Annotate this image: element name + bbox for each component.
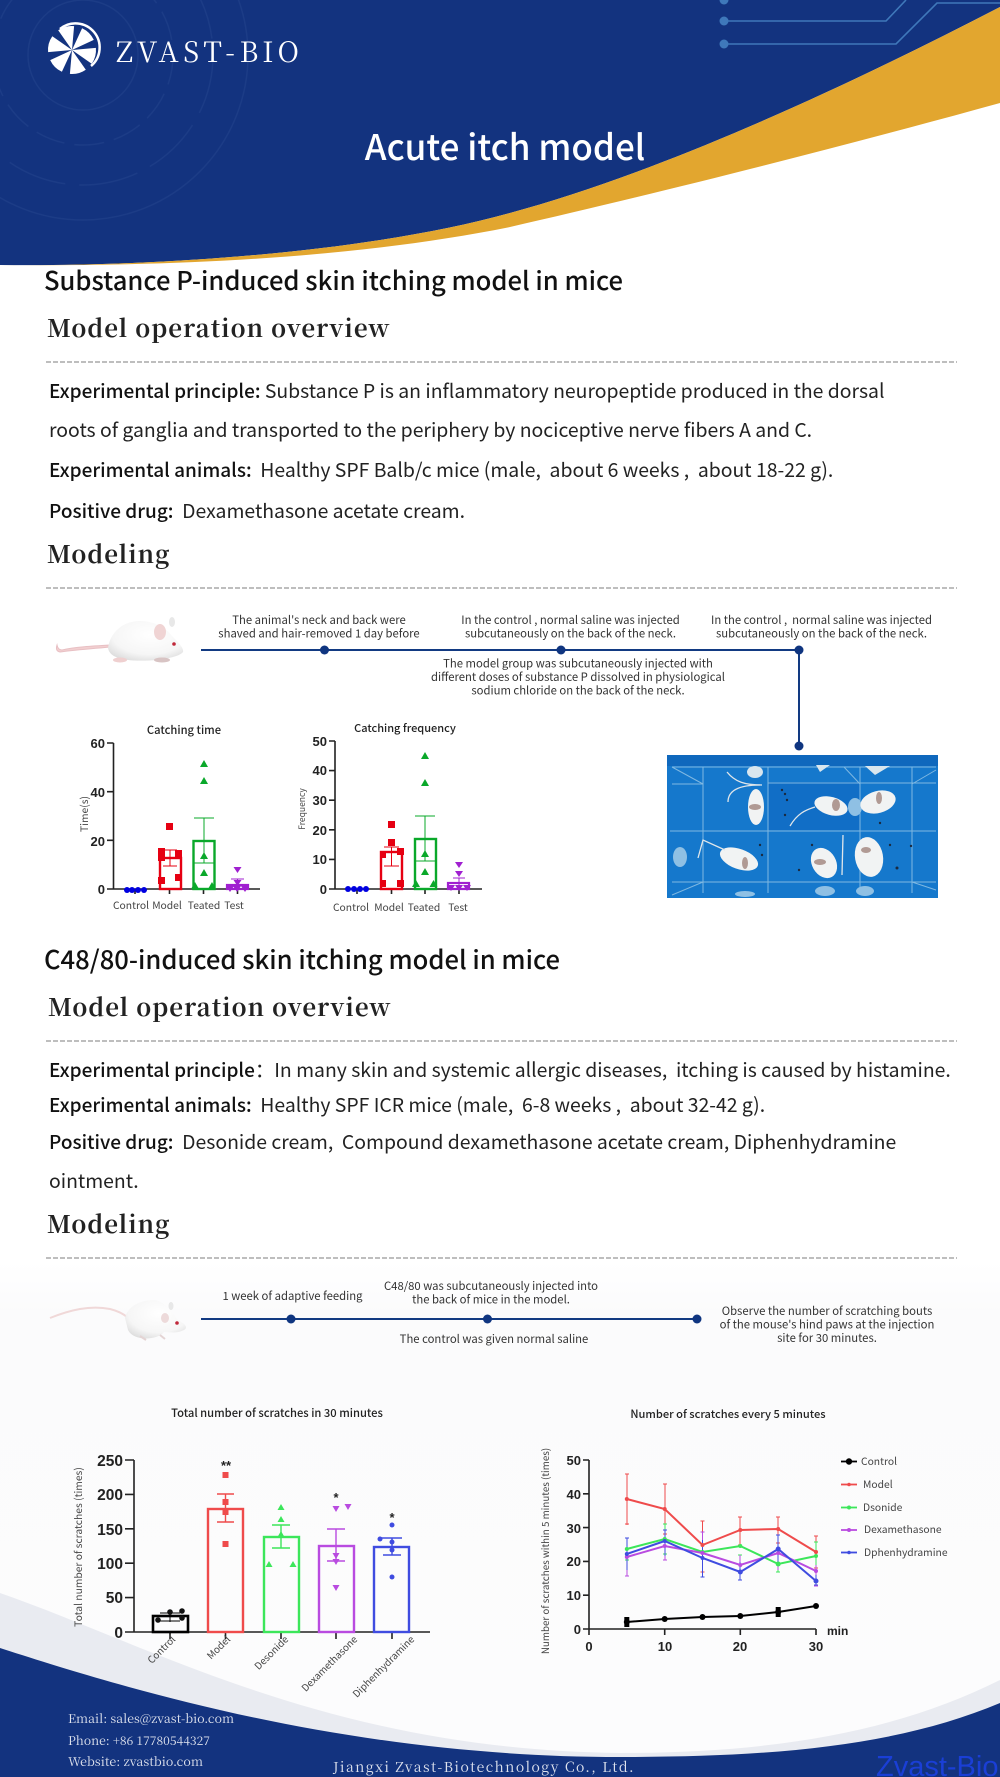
- text block: model overview: ointment.: [49, 1165, 139, 1194]
- icon: mouse: [56, 617, 183, 662]
- timeline labels: In the control , normal saline was injected: [461, 612, 680, 628]
- timeline: C48/80: [201, 1314, 702, 1324]
- bar chart: catching frequency: 20: [313, 823, 327, 838]
- line chart: scratches every 5 minutes: 30: [567, 1521, 581, 1536]
- timeline labels: 1 week of adaptive feeding: [222, 1288, 363, 1304]
- timeline labels: subcutaneously on the back of the neck.: [716, 626, 927, 642]
- bar chart: catching time: 40: [91, 785, 105, 800]
- legend: Dexamethasone: [864, 1521, 942, 1536]
- bar chart: catching frequency: Model: [374, 899, 404, 914]
- contact details: Phone: +86 17780544327: [68, 1732, 210, 1749]
- line chart: scratches every 5 minutes: 0: [585, 1639, 593, 1654]
- footer band: [0, 1593, 1000, 1777]
- timeline labels: different doses of substance P dissolved in physiological: [431, 669, 725, 685]
- line chart: scratches every 5 minutes: 20: [733, 1639, 747, 1654]
- legend: [841, 1453, 948, 1559]
- contact details: Email: sales@zvast-bio.com: [68, 1710, 234, 1727]
- bar chart: total scratches: 0: [114, 1625, 123, 1642]
- subheading: model operation overview: Model operation overview: [47, 309, 391, 344]
- text block: model overview: Positive drug: Desonide cream, Compound dexamethasone acetate cream, Diphenhydramine: [49, 1126, 896, 1155]
- bar chart: catching frequency: Catching frequency: [354, 720, 456, 736]
- legend: Model: [863, 1476, 893, 1491]
- icon: mouse: [50, 1300, 186, 1340]
- timeline labels: The control was given normal saline: [400, 1331, 588, 1347]
- subheading: modeling: Modeling: [47, 535, 170, 570]
- bar chart: catching time: Model: [152, 897, 182, 912]
- timeline labels: The model group was subcutaneously injected with: [443, 656, 713, 672]
- bar chart: total scratches: Desonide: [251, 1632, 292, 1672]
- timeline labels: C48/80 was subcutaneously injected into: [384, 1278, 598, 1294]
- timeline labels: of the mouse's hind paws at the injection: [720, 1316, 934, 1332]
- timeline labels: The animal's neck and back were: [232, 612, 406, 628]
- timeline: substance P: [201, 646, 804, 750]
- bar chart: catching time: Control: [113, 897, 149, 912]
- line chart: scratches every 5 minutes: 10: [658, 1639, 672, 1654]
- timeline labels: Observe the number of scratching bouts: [722, 1303, 932, 1319]
- text block: model overview: Experimental principle：In many skin and systemic allergic diseases, itching is caused by histamine.: [49, 1054, 951, 1083]
- timeline labels: the back of mice in the model.: [412, 1292, 570, 1308]
- timeline labels: sodium chloride on the back of the neck.: [471, 682, 685, 698]
- brand name: ZVAST-BIO: [116, 31, 299, 71]
- bar chart: catching frequency: 40: [313, 763, 327, 778]
- bar chart: catching time: Test: [224, 897, 244, 912]
- bar chart: catching time: [76, 722, 260, 912]
- line chart: scratches every 5 minutes: 0: [574, 1622, 581, 1637]
- title: Acute itch model: [365, 120, 645, 171]
- bar chart: total scratches: *: [389, 1510, 395, 1525]
- logo icon: [48, 23, 100, 74]
- bar chart: catching time: Catching time: [147, 722, 221, 738]
- bar chart: catching frequency: 30: [313, 793, 327, 808]
- photo: mice in cages: [667, 755, 938, 898]
- bar chart: catching frequency: 10: [313, 852, 327, 867]
- bar chart: catching frequency: Test: [448, 899, 468, 914]
- logo: [48, 23, 299, 74]
- timeline labels: shaved and hair-removed 1 day before: [218, 626, 420, 642]
- bar chart: total scratches: 250: [97, 1453, 123, 1470]
- bar chart: total scratches: Dexamethasone: [298, 1632, 361, 1694]
- text block: model overview: Experimental animals: Healthy SPF ICR mice (male, 6-8 weeks , about 32-42 g).: [49, 1089, 765, 1118]
- line chart: scratches every 5 minutes: 30: [809, 1639, 823, 1654]
- bar chart: total scratches: 150: [97, 1522, 123, 1539]
- line chart: scratches every 5 minutes: min: [827, 1624, 848, 1638]
- bar chart: catching time: Time(s): [76, 796, 91, 832]
- bar chart: catching frequency: Teated: [408, 899, 440, 914]
- legend: Dphenhydramine: [864, 1544, 948, 1559]
- bar chart: catching time: 0: [98, 882, 105, 897]
- bar chart: catching time: 20: [91, 834, 105, 849]
- bar chart: total scratches: 50: [106, 1590, 123, 1607]
- bar chart: catching frequency: [296, 720, 482, 914]
- bar chart: total scratches: 100: [97, 1556, 123, 1573]
- line chart: scratches every 5 minutes: [538, 1406, 948, 1654]
- legend: Control: [861, 1453, 897, 1468]
- subheading: model operation overview: Model operation overview: [48, 988, 392, 1023]
- bar chart: catching time: 60: [91, 736, 105, 751]
- bar chart: total scratches: 200: [97, 1487, 123, 1504]
- bar chart: total scratches: Total number of scratches (times): [70, 1467, 85, 1627]
- text block: model overview: [49, 1054, 951, 1194]
- bar chart: total scratches: Total number of scratches in 30 minutes: [171, 1405, 383, 1421]
- contact details: Website: zvastbio.com: [68, 1753, 203, 1770]
- bar chart: catching frequency: 50: [313, 734, 327, 749]
- timeline labels: site for 30 minutes.: [777, 1330, 877, 1346]
- line chart: scratches every 5 minutes: Number of scratches within 5 minutes (times): [538, 1448, 552, 1654]
- bar chart: catching frequency: Control: [333, 899, 369, 914]
- timeline labels: In the control , normal saline was injected: [711, 612, 932, 628]
- line chart: scratches every 5 minutes: 20: [567, 1554, 581, 1569]
- timeline labels: subcutaneously on the back of the neck.: [465, 626, 676, 642]
- text block: model overview: Experimental principle: Substance P is an inflammatory neuropeptide produced in the dorsal: [49, 375, 884, 404]
- legend: Dsonide: [863, 1499, 903, 1514]
- line chart: scratches every 5 minutes: 50: [567, 1453, 581, 1468]
- timeline labels: [218, 612, 932, 698]
- section heading: C48/80: C48/80-induced skin itching model in mice: [44, 940, 560, 977]
- bar chart: total scratches: Model: [203, 1632, 233, 1662]
- bar chart: total scratches: *: [333, 1490, 339, 1505]
- text block: model overview: Experimental animals: Healthy SPF Balb/c mice (male, about 6 weeks , about 18-22 g).: [49, 454, 833, 483]
- timeline labels: [222, 1278, 934, 1347]
- line chart: scratches every 5 minutes: 40: [567, 1487, 581, 1502]
- bar chart: total scratches: Diphenhydramine: [349, 1632, 418, 1700]
- text block: model overview: roots of ganglia and transported to the periphery by nociceptive nerve fibers A and C.: [49, 414, 812, 443]
- bar chart: catching frequency: 0: [320, 882, 327, 897]
- section heading: substance P: Substance P-induced skin itching model in mice: [44, 261, 623, 298]
- line chart: scratches every 5 minutes: Number of scratches every 5 minutes: [630, 1406, 826, 1422]
- company name: Jiangxi Zvast-Biotechnology Co., Ltd.: [332, 1757, 635, 1777]
- text block: model overview: Positive drug: Dexamethasone acetate cream.: [49, 495, 465, 524]
- bar chart: catching time: Teated: [188, 897, 220, 912]
- text block: model overview: [49, 375, 884, 524]
- bar chart: total scratches: Control: [144, 1632, 178, 1666]
- contact details: [68, 1710, 234, 1770]
- bar chart: total scratches: **: [221, 1458, 232, 1473]
- header banner: [0, 0, 1000, 265]
- bar chart: total scratches: [70, 1405, 430, 1700]
- subheading: modeling: Modeling: [47, 1205, 170, 1240]
- line chart: scratches every 5 minutes: 10: [567, 1588, 581, 1603]
- bar chart: catching frequency: Frequency: [296, 788, 308, 830]
